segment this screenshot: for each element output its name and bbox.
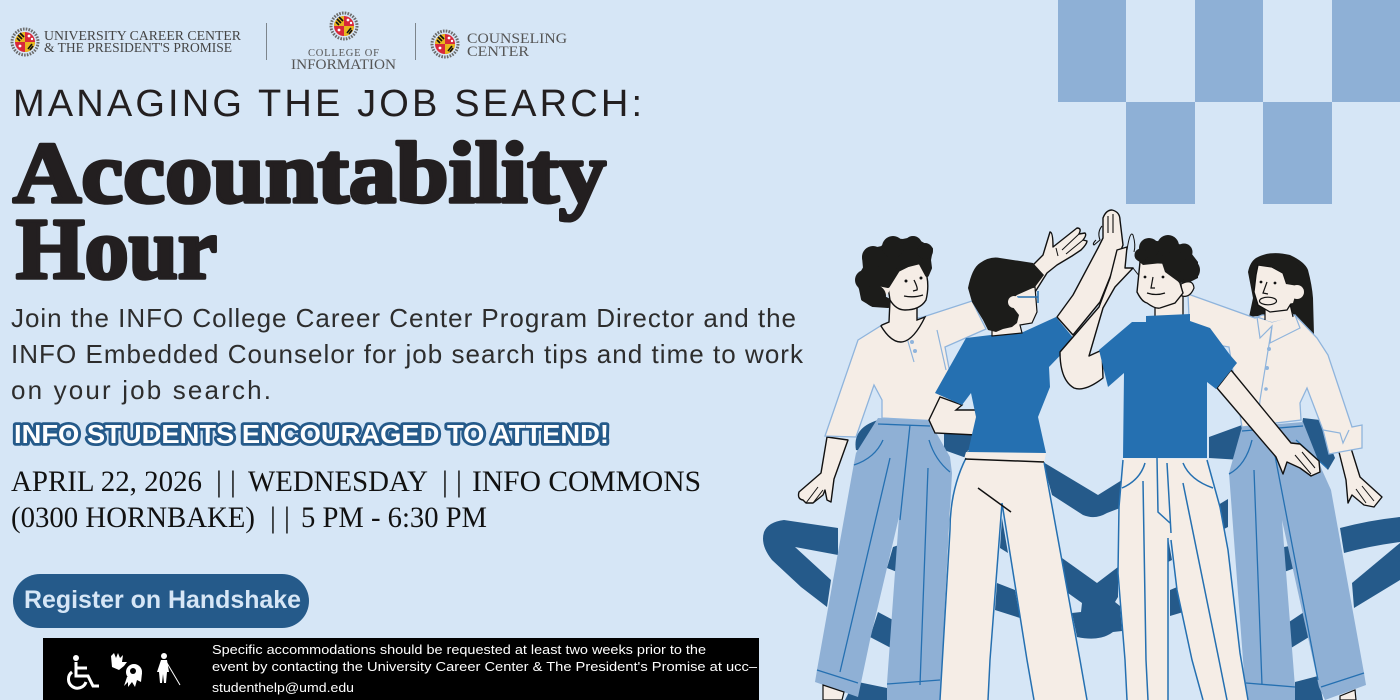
logo: College of Information: INFORMATION bbox=[291, 57, 396, 73]
accommodations text: studenthelp@umd.edu bbox=[212, 680, 354, 695]
illustration: group high five bbox=[763, 210, 1400, 700]
description: on your job search. bbox=[11, 375, 271, 405]
icon: wheelchair bbox=[68, 655, 99, 688]
description bbox=[11, 303, 804, 405]
accommodations bar bbox=[43, 638, 759, 700]
face bbox=[888, 262, 928, 310]
denim trousers bbox=[1229, 422, 1366, 700]
person: right, long hair bbox=[1188, 253, 1382, 700]
accommodations text: event by contacting the University Career Center & The President's Promise at ucc– bbox=[212, 659, 758, 674]
glasses bbox=[1017, 291, 1038, 303]
event details bbox=[11, 466, 701, 534]
neck bbox=[1265, 303, 1293, 322]
logo: Counseling Center bbox=[415, 23, 568, 60]
register button: Register on Handshake bbox=[24, 586, 301, 614]
description: INFO Embedded Counselor for job search tips and time to work bbox=[11, 339, 804, 369]
face bbox=[1254, 265, 1292, 312]
cream shirt bbox=[825, 301, 986, 437]
logo: College of Information bbox=[266, 13, 396, 73]
description: Join the INFO College Career Center Program Director and the bbox=[11, 303, 796, 333]
cream shirt bbox=[1188, 294, 1362, 454]
main title: Accountability bbox=[13, 124, 606, 221]
event details: || bbox=[216, 466, 236, 498]
subtitle: MANAGING THE JOB SEARCH: bbox=[13, 83, 642, 125]
right forearm and hand bbox=[1338, 445, 1382, 507]
lowered arm and hand bbox=[1217, 370, 1320, 476]
logo: Counseling Center: CENTER bbox=[467, 44, 529, 60]
logo: University Career Center: & THE PRESIDENT'S PROMISE bbox=[44, 41, 232, 56]
cream trousers bbox=[1118, 458, 1248, 700]
person: center, back view bbox=[929, 210, 1135, 700]
register button bbox=[13, 574, 309, 628]
checkerboard squares bbox=[1058, 0, 1400, 204]
neck bbox=[881, 300, 925, 342]
accommodations text: Specific accommodations should be requested at least two weeks prior to the bbox=[212, 642, 706, 657]
cream trousers bbox=[940, 450, 1087, 700]
denim trousers bbox=[815, 418, 952, 700]
event details: INFO COMMONS bbox=[472, 466, 701, 498]
face bbox=[1137, 262, 1183, 308]
audience callout: INFO STUDENTS ENCOURAGED TO ATTEND! bbox=[14, 421, 609, 449]
event details: (0300 HORNBAKE) bbox=[11, 502, 255, 534]
raised arm and hand bbox=[1057, 210, 1135, 335]
hair bbox=[968, 258, 1044, 332]
logo: University Career Center bbox=[12, 29, 242, 56]
person: left, curly hair bbox=[798, 228, 1087, 700]
event details: || bbox=[270, 502, 290, 534]
lowered arm bbox=[929, 397, 978, 435]
main title: Hour bbox=[16, 200, 217, 297]
ear bbox=[1181, 282, 1194, 296]
event details: APRIL 22, 2026 bbox=[11, 466, 202, 498]
hair bbox=[855, 236, 933, 307]
logo: University Career Center: UNIVERSITY CAREER CENTER bbox=[44, 29, 242, 44]
raised arm and hand bbox=[1060, 247, 1133, 389]
event details: WEDNESDAY bbox=[248, 466, 428, 498]
ribbon background bbox=[763, 418, 1400, 700]
logo: Counseling Center: COUNSELING bbox=[467, 31, 568, 47]
blue shirt bbox=[935, 317, 1075, 453]
neck bbox=[1155, 292, 1183, 318]
neck and face bbox=[992, 287, 1037, 336]
accommodations text bbox=[212, 642, 758, 695]
person: center right, front view bbox=[1060, 235, 1320, 700]
left forearm and hand bbox=[798, 437, 848, 503]
raised arm and hand bbox=[1000, 228, 1087, 330]
blue shirt bbox=[1099, 314, 1237, 458]
logo: College of Information: COLLEGE OF bbox=[308, 48, 379, 59]
long hair bbox=[1248, 253, 1314, 335]
main title bbox=[13, 124, 606, 297]
icon: person with cane bbox=[157, 653, 180, 685]
event details: 5 PM - 6:30 PM bbox=[301, 502, 487, 534]
ankles bbox=[823, 685, 1356, 700]
event details: || bbox=[442, 466, 462, 498]
curly hair bbox=[1134, 235, 1200, 283]
icon: sign language bbox=[111, 653, 142, 687]
